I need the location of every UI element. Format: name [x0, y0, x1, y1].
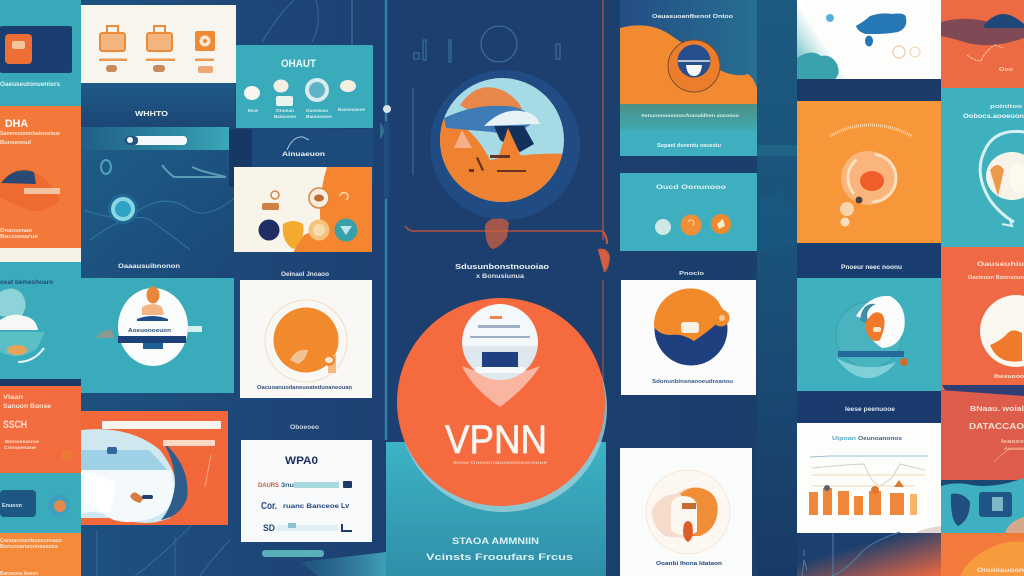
band caption: Senuoonoasonocfoanaldhen ansonuo [641, 113, 739, 119]
captions [248, 107, 365, 119]
left orange DHA card: Onansenan [0, 228, 32, 234]
left teal header card [0, 0, 81, 106]
red horizontal line with marker [405, 218, 603, 249]
caption above WPA card: Oboeoeo [290, 425, 319, 431]
heading: WPA0 [285, 455, 318, 467]
panel: coral window card [81, 411, 228, 525]
panel: white lock card [620, 448, 752, 576]
center caption [455, 264, 549, 280]
left line beads [380, 105, 391, 199]
faint background line art [97, 0, 352, 576]
row two: Lv [341, 503, 349, 510]
search pill [124, 136, 187, 145]
blue header strip [81, 83, 235, 127]
bar chart card [797, 423, 941, 533]
left orange footer card: Canuaronenbuseuneaus [0, 538, 62, 544]
panel: right orange hero card [620, 0, 757, 156]
coral data card: BNaau. woial [970, 404, 1024, 413]
pyramid [498, 128, 521, 159]
faint triangles [802, 532, 900, 576]
left orange DHA card: DHA [5, 118, 28, 130]
captions: Boue [248, 108, 258, 113]
dark shadow [494, 126, 534, 152]
bar markers [824, 480, 904, 494]
row two: ruanc Banceoe [283, 503, 339, 510]
orange footer card [941, 533, 1024, 576]
orange coin card [797, 101, 941, 243]
left orange DHA card [0, 106, 81, 248]
blue map panel [81, 150, 236, 278]
VPN wordmark: VPNN [445, 418, 547, 462]
icon: orange case one [100, 26, 125, 51]
left orange footer card: Bonuseanuonoaseons [0, 544, 58, 550]
left teal button card [0, 473, 81, 533]
bottom coral corner [797, 533, 941, 576]
panel: cream and orange badge card [234, 167, 372, 252]
panel: left column [0, 0, 81, 576]
orange and navy disc [654, 288, 730, 366]
captions: Banuoeon [274, 114, 296, 119]
teal pill [262, 550, 324, 557]
left orange DHA card: Bunseneud [0, 140, 31, 146]
coral data card [941, 390, 1024, 480]
small label under badge card: Oeinaol Jnoaoo [281, 272, 329, 278]
left coral card: Sanuon Bonse [3, 404, 52, 410]
left coral card [0, 386, 81, 473]
chart title [832, 436, 902, 442]
bottom teal wedge [300, 552, 386, 576]
caption: Ooanbi Ihona Idataon [656, 561, 723, 567]
search bars [102, 421, 221, 454]
center caption: Sdusunbonstnouoiao [455, 264, 549, 271]
left coral card: SSCH [3, 419, 27, 431]
left teal cloud card: oeat bemeshoaro [0, 280, 53, 286]
center faint chart glyphs [414, 26, 560, 62]
icon rule lines [99, 58, 214, 61]
blue map panel: Oaaausuibnonon [118, 263, 180, 270]
teal plate card: Oobocs.aooeuon [963, 114, 1024, 120]
left coral card: Conuoesane [4, 445, 37, 450]
orange ground [440, 118, 562, 202]
panel: navy tab with route label [229, 129, 373, 187]
left teal button card: Enueon [2, 503, 23, 509]
icon row [244, 78, 356, 106]
center globe emblem [430, 70, 580, 220]
left teal header card: Oaeuseutonueniors [0, 82, 61, 88]
blue header strip: WHHTO [135, 111, 169, 118]
wordmark caption: Sonu Oneuonanusonneononue [453, 460, 548, 465]
panel: top icons cream card [81, 5, 236, 83]
icon: orange case two [147, 26, 172, 51]
bars [809, 488, 917, 515]
vertical connector lines [386, 0, 603, 440]
teal plate card: poinitoo [990, 104, 1023, 110]
left cream strip [0, 248, 81, 262]
pale hat highlight [484, 111, 540, 126]
coral landscape card [941, 0, 1024, 88]
trend lines [810, 456, 928, 486]
row one [258, 481, 352, 489]
coral bowl card: Ibesuooo [994, 374, 1024, 380]
coral data card: DATACCAO [969, 421, 1024, 431]
left coral card: Bonoesanue [5, 439, 40, 444]
row one: DAURS [258, 483, 279, 489]
navy label strip: Ieese peenuooe [845, 406, 895, 413]
caption: Sdonunbinsnanoeudreanou [652, 379, 733, 385]
teal device card [941, 478, 1024, 533]
row one: 3nu [281, 483, 294, 489]
navy label strip [797, 243, 941, 278]
left orange DHA card: Bacuonarue [0, 234, 38, 240]
icon: orange square swirl [195, 31, 215, 51]
left orange DHA card: Sanereuonorbalensious [0, 131, 60, 137]
pale halo [646, 470, 730, 554]
teal globe card [797, 278, 941, 391]
panel: teal mascot card [81, 278, 234, 393]
panel: center teal base [386, 442, 606, 576]
label: Ainuaeuon [282, 151, 325, 158]
marks [469, 155, 526, 172]
white map card [797, 0, 941, 79]
caption: Aoeuonoeuon [128, 328, 171, 334]
upper icons [262, 188, 348, 210]
coral data card: Ieaoes [1001, 439, 1024, 445]
navy strip [797, 79, 941, 101]
panel: OHAUT teal card [236, 45, 373, 128]
panel: right teal icons card [620, 173, 757, 251]
chart corner [797, 526, 941, 533]
chart title: Uipoan [832, 436, 857, 442]
orange landscape [620, 25, 757, 104]
panel: far right column [941, 0, 1024, 576]
big coral VPN circle [397, 298, 607, 512]
caption: Oacuoanuodaneuoateduoaneouan [257, 385, 353, 391]
captions: Banoeuanoe [338, 107, 365, 112]
row three: SD [263, 523, 275, 533]
teal caption: Sopanl dsnentu oeuestu [657, 143, 721, 149]
laptop disc [462, 304, 538, 382]
caption between right cards: Pnocio [679, 271, 705, 277]
left orange footer card [0, 533, 81, 576]
coral bowl card: Oauseuhiu [977, 261, 1024, 268]
panel: white orange-ball card [240, 280, 372, 398]
bottom subheading: Vcinsts Frooufars Frcus [426, 552, 573, 563]
row two: Cor. [261, 501, 277, 512]
coral data card: Aeouen [1004, 446, 1024, 451]
coral bowl card: Oacleuon Bonnsoun [968, 275, 1024, 281]
mascot circle [96, 286, 202, 366]
panel: white shield card [621, 280, 756, 395]
navy label strip: Pnoeur neec noonu [841, 265, 902, 271]
left teal cloud card [0, 262, 81, 379]
panel: side teal column [757, 0, 797, 576]
center caption: x Bonusiunua [476, 274, 525, 280]
row two [261, 501, 349, 512]
window illustration [81, 429, 211, 523]
panel: second column blue band [81, 83, 236, 278]
captions: Banuoaneo [306, 114, 332, 119]
round icons [655, 214, 731, 236]
orange footer card: Onuloauoon [977, 567, 1024, 574]
captions: Onuean [276, 108, 294, 113]
blue hat [444, 106, 534, 134]
small figure [130, 492, 153, 503]
heading: OHAUT [281, 58, 316, 70]
orange lock blob [652, 487, 718, 542]
shield point [462, 366, 540, 407]
panel: WPA pricing card [241, 440, 372, 542]
coral landscape card: Ooo [999, 67, 1013, 73]
mini labels [106, 65, 213, 73]
navy label strip [797, 391, 941, 423]
chart title: Oeunoanonos [858, 436, 902, 442]
panel: right column second [797, 0, 941, 576]
header text: Oauasuoanfbenot Ontoo [652, 14, 734, 20]
green band [620, 104, 757, 130]
teal gradient band [81, 127, 229, 150]
badge icons [258, 218, 358, 249]
eye icon [668, 40, 720, 92]
teal plate card [941, 88, 1024, 247]
route curve [287, 137, 309, 150]
navy notch [942, 385, 1024, 397]
captions: Ouoneanu [306, 108, 328, 113]
orange hat dome [460, 87, 522, 110]
bottom heading: STAOA AMMNIIN [452, 536, 539, 547]
left coral card: Vlaan [3, 395, 23, 401]
navy divider [0, 379, 81, 386]
red connector ornament [598, 232, 609, 272]
heading: Oucd Oonunooo [656, 184, 726, 191]
orange ball [265, 300, 347, 382]
blue header [620, 0, 757, 104]
coral bowl card [941, 247, 1024, 390]
